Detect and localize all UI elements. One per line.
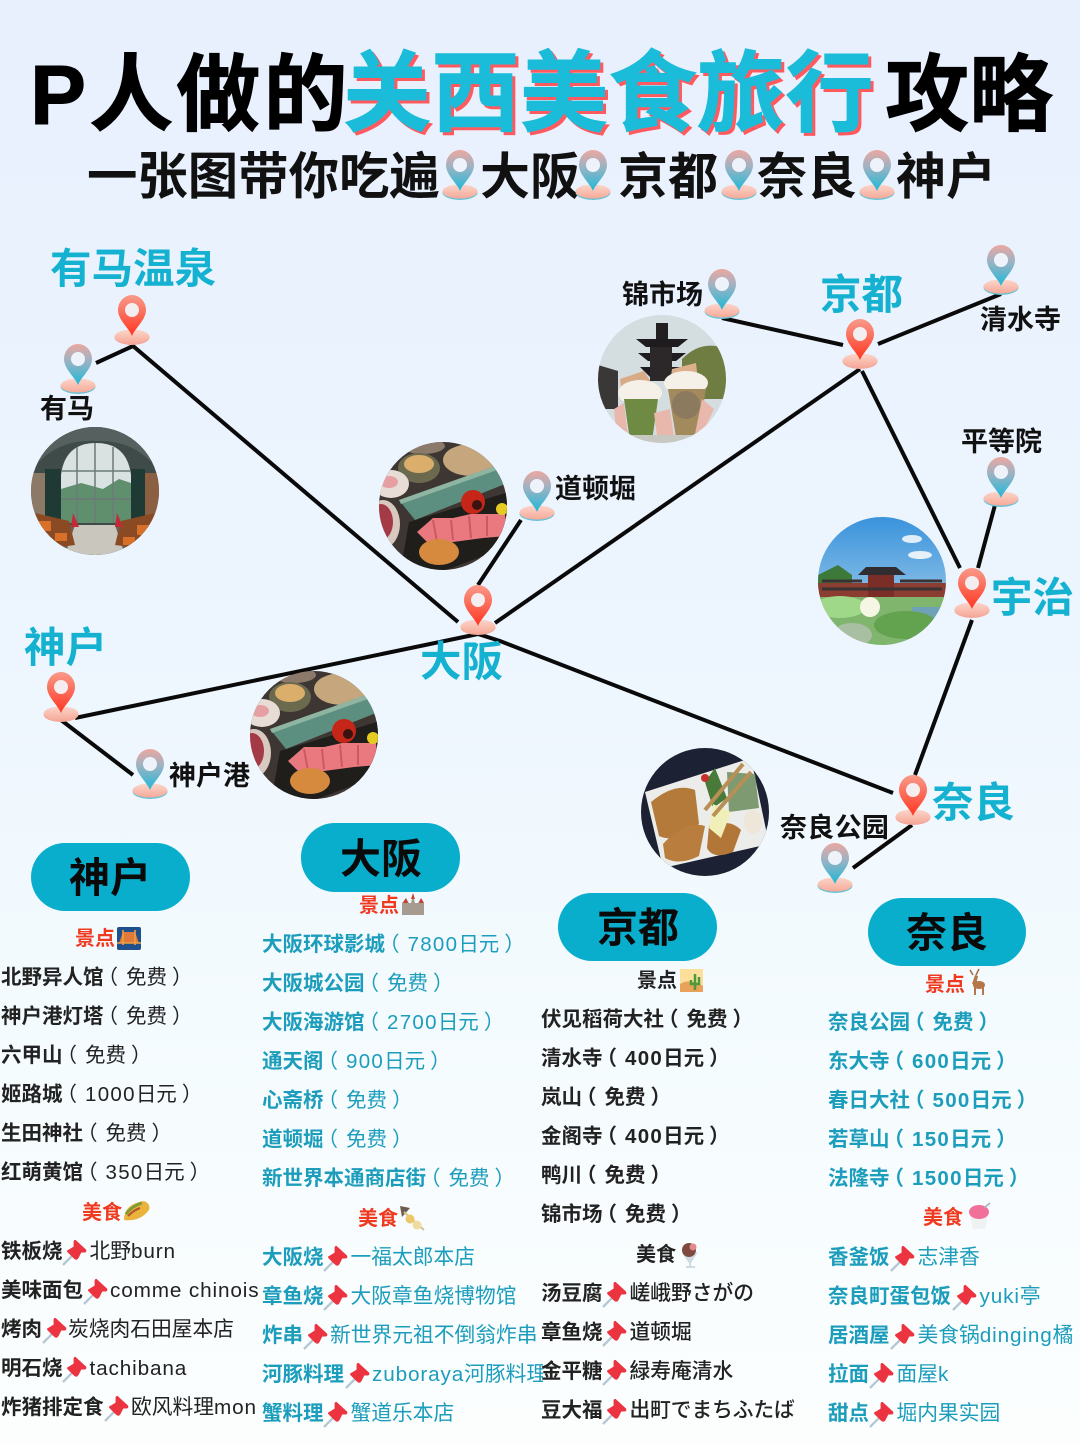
subtitle with pins [87, 148, 996, 205]
list: Kobe sights: 神户港灯塔（ 免费） [1, 1004, 192, 1028]
list: Kyoto food [541, 1282, 795, 1424]
list: Osaka food: 炸串 [262, 1324, 303, 1347]
section heading: Nara food: 美食 [923, 1205, 963, 1229]
title [30, 44, 1053, 146]
heading pill: Nara [868, 898, 1026, 966]
list: Nara food: yuki亭 [980, 1285, 1041, 1308]
list: Kobe food: tachibana [90, 1357, 187, 1380]
list: Osaka sights: 大阪城公园（ 免费） [262, 972, 454, 995]
label: Arima: 有马 [40, 394, 94, 424]
list: Nara sights [828, 1010, 1037, 1190]
list: Nara sights: 若草山（ 150日元） [828, 1128, 1017, 1151]
label: Kiyomizu: 清水寺 [980, 305, 1061, 335]
section heading: Nara sights [925, 969, 985, 996]
list: Kobe food: 炸猪排定食 [1, 1395, 104, 1419]
list: Kyoto sights: 锦市场（ 免费） [541, 1202, 692, 1226]
list: Nara food: 堀内果实园 [896, 1402, 1000, 1425]
section heading: Kyoto food [636, 1242, 698, 1268]
list: Kobe food: 铁板烧 [1, 1240, 63, 1263]
list: Kyoto food: 金平糖 [541, 1359, 602, 1383]
map pin: Nara [896, 775, 930, 825]
subtitle with pins: 京都 [618, 149, 718, 205]
list: Kobe sights: 姬路城（ 1000日元） [1, 1083, 202, 1106]
list: Kobe food: 烤肉 [1, 1318, 42, 1341]
label: Nishiki market: 锦市场 [622, 280, 703, 310]
list: Kyoto food: 汤豆腐 [541, 1282, 602, 1305]
list: Nara food [828, 1246, 1073, 1427]
list: Osaka sights [262, 933, 525, 1190]
heading pill: Nara: 奈良 [906, 910, 988, 956]
panel: Kyoto column [541, 893, 795, 1424]
map pin: Byodoin [984, 457, 1018, 507]
map pin: Kobe [44, 672, 78, 722]
map pin: Kobe port [132, 749, 168, 799]
list: Kyoto food: 出町でまちふたば [630, 1399, 795, 1422]
list: Osaka food [262, 1246, 547, 1427]
heading pill: Osaka: 大阪 [340, 836, 422, 882]
route lines [61, 294, 1001, 868]
photo: Nishiki market drinks [598, 315, 726, 445]
section heading: Nara sights: 景点 [925, 973, 965, 996]
list: Nara sights: 东大寺（ 600日元） [828, 1049, 1017, 1073]
panel: Kobe column [1, 843, 259, 1421]
heading pill: Osaka [301, 823, 460, 892]
list: Osaka sights: 心斋桥（ 免费） [262, 1088, 412, 1112]
section heading: Osaka sights [359, 893, 424, 917]
section heading: Kobe sights [75, 927, 141, 950]
list: Kobe sights [1, 966, 210, 1184]
section heading: Kobe food: 美食 [82, 1200, 122, 1224]
list: Kyoto sights: 鸭川（ 免费） [541, 1164, 671, 1187]
list: Kyoto sights: 伏见稻荷大社（ 免费） [541, 1007, 753, 1031]
map pin: Nishiki [704, 269, 740, 319]
list: Osaka food: 大阪章鱼烧博物馆 [350, 1285, 517, 1308]
map pin: Kiyomizu [984, 245, 1018, 295]
list: Kyoto sights: 清水寺（ 400日元） [541, 1047, 730, 1070]
section heading: Kyoto sights [637, 969, 703, 992]
section heading: Kobe sights: 景点 [75, 927, 115, 950]
list: Nara food: 甜点 [828, 1402, 869, 1425]
label: Nara park: 奈良公园 [780, 813, 889, 843]
map pin: Kyoto [842, 319, 878, 369]
label: Uji: 宇治 [991, 574, 1074, 621]
heading pill: Kyoto: 京都 [597, 905, 679, 951]
list: Kobe sights: 红萌黄馆（ 350日元） [1, 1161, 210, 1184]
photo: Dotonbori wagyu set [366, 438, 509, 576]
map pin: Osaka [460, 585, 496, 635]
title: 关西美食旅行 [346, 47, 877, 146]
list: Kyoto food: 章鱼烧 [541, 1320, 603, 1344]
panel: Nara column [828, 898, 1073, 1427]
list: Nara food: 香釜饭 [828, 1246, 890, 1269]
title: 关西美食旅行 [343, 44, 874, 143]
list: Osaka sights: 大阪海游馆（ 2700日元） [262, 1010, 504, 1034]
title: P人做的 [30, 48, 351, 142]
subtitle with pins: 奈良 [757, 149, 857, 205]
map pin: Arima Onsen [114, 295, 150, 345]
heading pill: Kyoto [558, 893, 717, 961]
section heading: Osaka food: 美食 [358, 1206, 398, 1230]
list: Kobe food [1, 1240, 259, 1421]
list: Kobe food: 北野burn [90, 1240, 176, 1263]
list: Osaka sights: 新世界本通商店街（ 免费） [262, 1166, 515, 1190]
list: Kyoto sights: 岚山（ 免费） [541, 1086, 671, 1109]
section heading: Kyoto food: 美食 [636, 1242, 676, 1266]
label: Kyoto: 京都 [820, 271, 903, 318]
list: Nara food: 志津香 [918, 1246, 980, 1269]
label: Kobe port: 神户港 [169, 761, 250, 791]
list: Kobe food: 炭烧肉石田屋本店 [68, 1318, 234, 1341]
list: Nara sights: 春日大社（ 500日元） [828, 1089, 1037, 1112]
list: Osaka food: 大阪烧 [262, 1246, 324, 1269]
list: Osaka sights: 大阪环球影城（ 7800日元） [262, 933, 525, 956]
list: Osaka food: 蟹料理 [262, 1402, 324, 1425]
list: Osaka food: zuboraya河豚料理 [372, 1363, 547, 1386]
list: Osaka food: 一福太郎本店 [350, 1246, 475, 1269]
heading pill: Kobe [31, 843, 190, 911]
list: Osaka food: 新世界元祖不倒翁炸串 [330, 1324, 538, 1347]
list: Kobe sights: 六甲山（ 免费） [1, 1044, 152, 1067]
list: Nara food: 拉面 [828, 1362, 869, 1386]
list: Kyoto sights: 金阁寺（ 400日元） [541, 1124, 730, 1148]
subtitle with pins: 一张图带你吃遍 [87, 148, 440, 205]
list: Osaka food: 河豚料理 [262, 1363, 344, 1386]
label: Osaka: 大阪 [420, 638, 503, 685]
list: Osaka sights: 道顿堀（ 免费） [262, 1128, 412, 1151]
section heading: Osaka food [358, 1206, 424, 1230]
list: Osaka food: 章鱼烧 [262, 1284, 324, 1308]
list: Nara sights: 奈良公园（ 免费） [828, 1010, 999, 1034]
list: Kyoto sights [541, 1007, 753, 1226]
map pin: Nara park [818, 843, 852, 893]
list: Kobe food: 美味面包 [1, 1279, 83, 1302]
photo: Byodoin temple [814, 517, 946, 647]
panel: Osaka column [262, 823, 547, 1427]
label: Arima Onsen: 有马温泉 [50, 245, 216, 292]
label: Dotonbori: 道顿堀 [555, 474, 636, 504]
map pin: Arima [60, 344, 96, 394]
list: Nara food: 面屋k [896, 1363, 949, 1386]
list: Nara food: 居酒屋 [828, 1324, 890, 1347]
subtitle with pins: 神户 [896, 149, 996, 205]
list: Osaka food: 蟹道乐本店 [350, 1402, 454, 1425]
photo: Nara fried cutlet [641, 748, 769, 876]
section heading: Osaka sights: 景点 [359, 894, 399, 917]
subtitle with pins: 大阪 [480, 149, 580, 205]
label: Byodoin: 平等院 [961, 427, 1042, 457]
list: Osaka sights: 通天阁（ 900日元） [262, 1049, 451, 1073]
label: Kobe: 神户 [24, 624, 107, 671]
title: 攻略 [885, 48, 1053, 142]
list: Kobe food: 明石烧 [1, 1357, 63, 1380]
list: Nara food: 美食锅dinging橘 [918, 1324, 1073, 1347]
photo: Kobe wagyu set [237, 667, 380, 805]
heading pill: Kobe: 神户 [69, 855, 151, 901]
photo: Arima hotel lounge [31, 427, 159, 555]
section heading: Kyoto sights: 景点 [637, 969, 677, 992]
list: Kyoto food: 嵯峨野さがの [630, 1282, 754, 1305]
list: Kyoto food: 豆大福 [541, 1399, 602, 1422]
list: Kobe food: 欧风料理mon [131, 1396, 257, 1419]
map pin: Uji [954, 568, 990, 618]
section heading: Kobe food [82, 1200, 149, 1224]
label: Nara: 奈良 [932, 779, 1015, 826]
map pin: Dotonbori [520, 471, 554, 521]
list: Kobe food: comme chinois [110, 1279, 259, 1302]
section heading: Nara food [923, 1203, 990, 1229]
list: Kobe sights: 北野异人馆（ 免费） [1, 966, 192, 989]
list: Nara sights: 法隆寺（ 1500日元） [828, 1167, 1029, 1190]
list: Kobe sights: 生田神社（ 免费） [1, 1122, 172, 1145]
list: Kyoto food: 道顿堀 [630, 1321, 692, 1344]
list: Kyoto food: 緑寿庵清水 [630, 1360, 734, 1383]
list: Nara food: 奈良町蛋包饭 [828, 1284, 951, 1308]
